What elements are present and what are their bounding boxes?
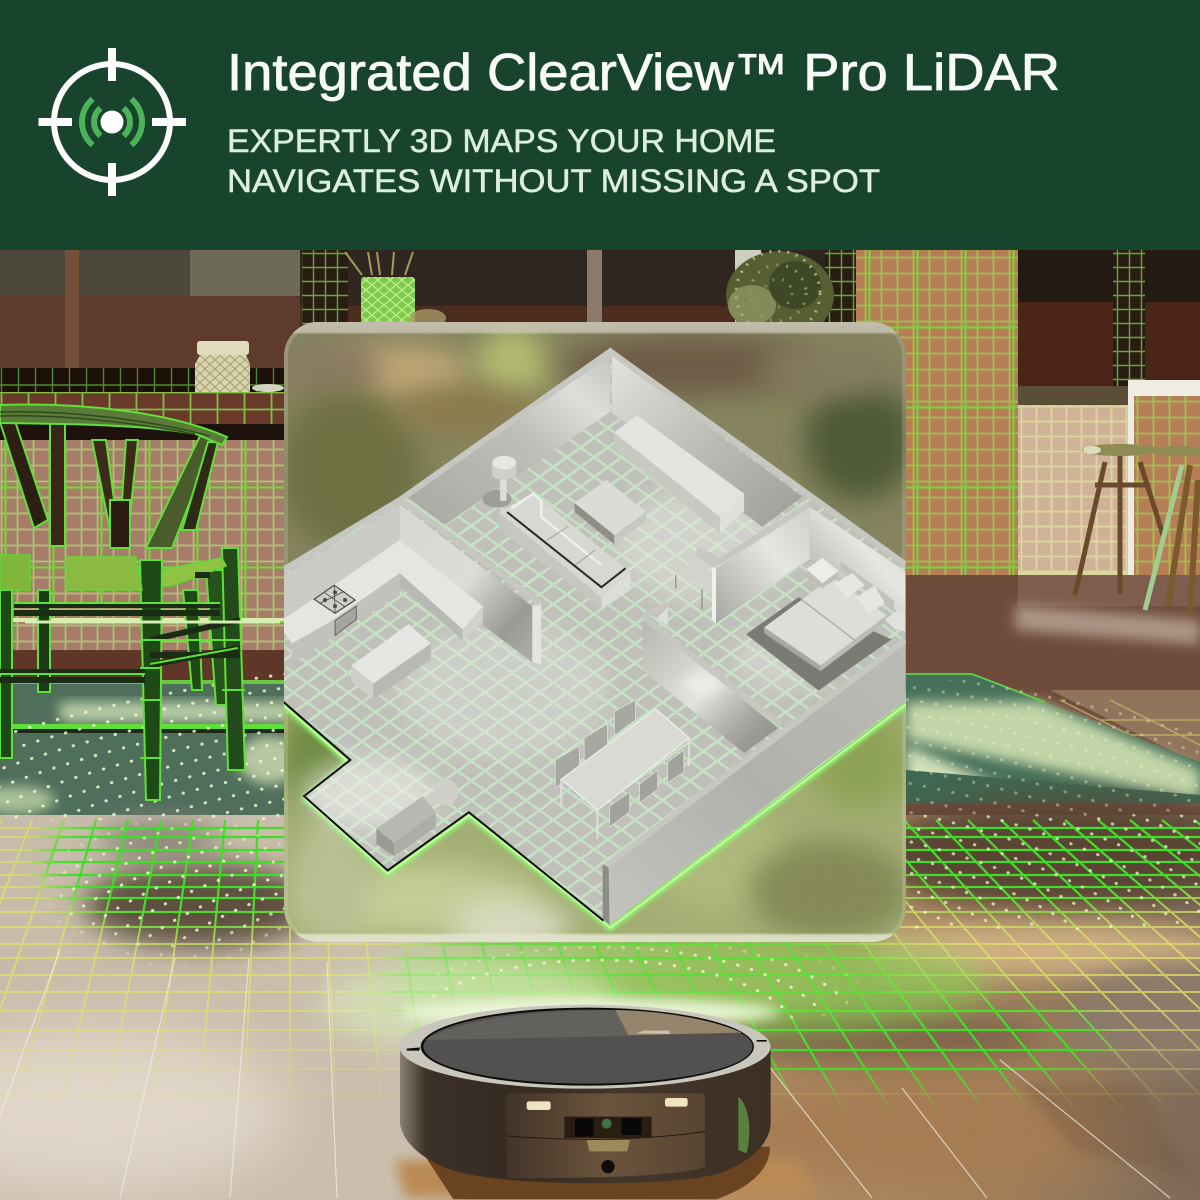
floor: [0, 800, 1200, 1200]
plan bottom edge: [283, 702, 603, 921]
oven: [335, 606, 356, 635]
floor lamp: [483, 456, 516, 508]
foyer dock: [433, 779, 458, 805]
robot side wheel: [738, 1097, 749, 1153]
robot vacuum: [399, 1005, 771, 1199]
foyer console: [376, 796, 436, 856]
bedroom walls: [712, 507, 905, 623]
jar on counter: [195, 341, 250, 392]
vase with stems: [345, 252, 446, 327]
front exterior wall: [603, 643, 905, 925]
sofa: [499, 493, 630, 608]
green glow above robot: [320, 933, 990, 1050]
LiDAR dot rings: [0, 653, 1200, 1040]
panel top and bottom glass rims: [284, 322, 906, 942]
bed: [764, 561, 894, 671]
plan edge line: [283, 704, 907, 928]
robot top disc: [399, 1005, 771, 1089]
living room back walls: [407, 355, 802, 527]
right rug: [906, 674, 1200, 804]
floor plank seams: [0, 950, 1170, 1198]
robot front panel: [506, 1093, 705, 1178]
lower partition wall: [643, 608, 778, 753]
LiDAR grid: base lines: [0, 820, 1200, 1120]
robot body: [400, 1047, 771, 1183]
stove: [314, 585, 355, 613]
right tiled column: [856, 250, 1018, 575]
icon: LiDAR target: [38, 48, 186, 196]
subtitle lines: NAVIGATES WITHOUT MISSING A SPOT: [227, 163, 880, 199]
kitchen partition wall: [400, 504, 541, 664]
robot shadow: [423, 1147, 770, 1199]
kitchen island: [352, 624, 431, 700]
tiled left wall: [0, 368, 300, 684]
subtitle lines: EXPERTLY 3D MAPS YOUR HOME: [227, 123, 776, 159]
title: Integrated ClearView™ Pro LiDAR: [227, 44, 1060, 102]
nightstands: [806, 558, 905, 631]
kitchen back wall: [283, 505, 400, 619]
accent chair: [676, 547, 721, 609]
wireframe dining chair: [0, 404, 290, 800]
bedroom rug: [746, 597, 892, 690]
header band: [0, 0, 1200, 251]
wall top rims: [283, 351, 905, 866]
isometric floor plan: [283, 349, 907, 928]
floor slab: [283, 349, 905, 925]
window and fence backdrop: [0, 250, 1200, 386]
TV console: [614, 415, 744, 533]
plate on counter: [252, 384, 284, 392]
coffee table: [575, 480, 646, 544]
green glow under plan: [283, 704, 907, 928]
frosted map panel: [280, 322, 915, 949]
left rug: [0, 684, 284, 815]
background photo: room with LiDAR grid: [0, 250, 1200, 1200]
panel blurred background: [280, 322, 915, 949]
kitchen counter: [283, 540, 483, 670]
bar stools: [1075, 444, 1200, 615]
LiDAR grid: green highlights: [0, 820, 1200, 1120]
right wall, tiles and counter: [1018, 380, 1200, 586]
bush: [726, 250, 834, 322]
panel frosted edge: [286, 324, 904, 940]
wood floor, far right: [906, 575, 1200, 815]
dining set: [555, 700, 689, 839]
floor highlight: [300, 489, 830, 830]
subtitle lines: [227, 123, 880, 199]
